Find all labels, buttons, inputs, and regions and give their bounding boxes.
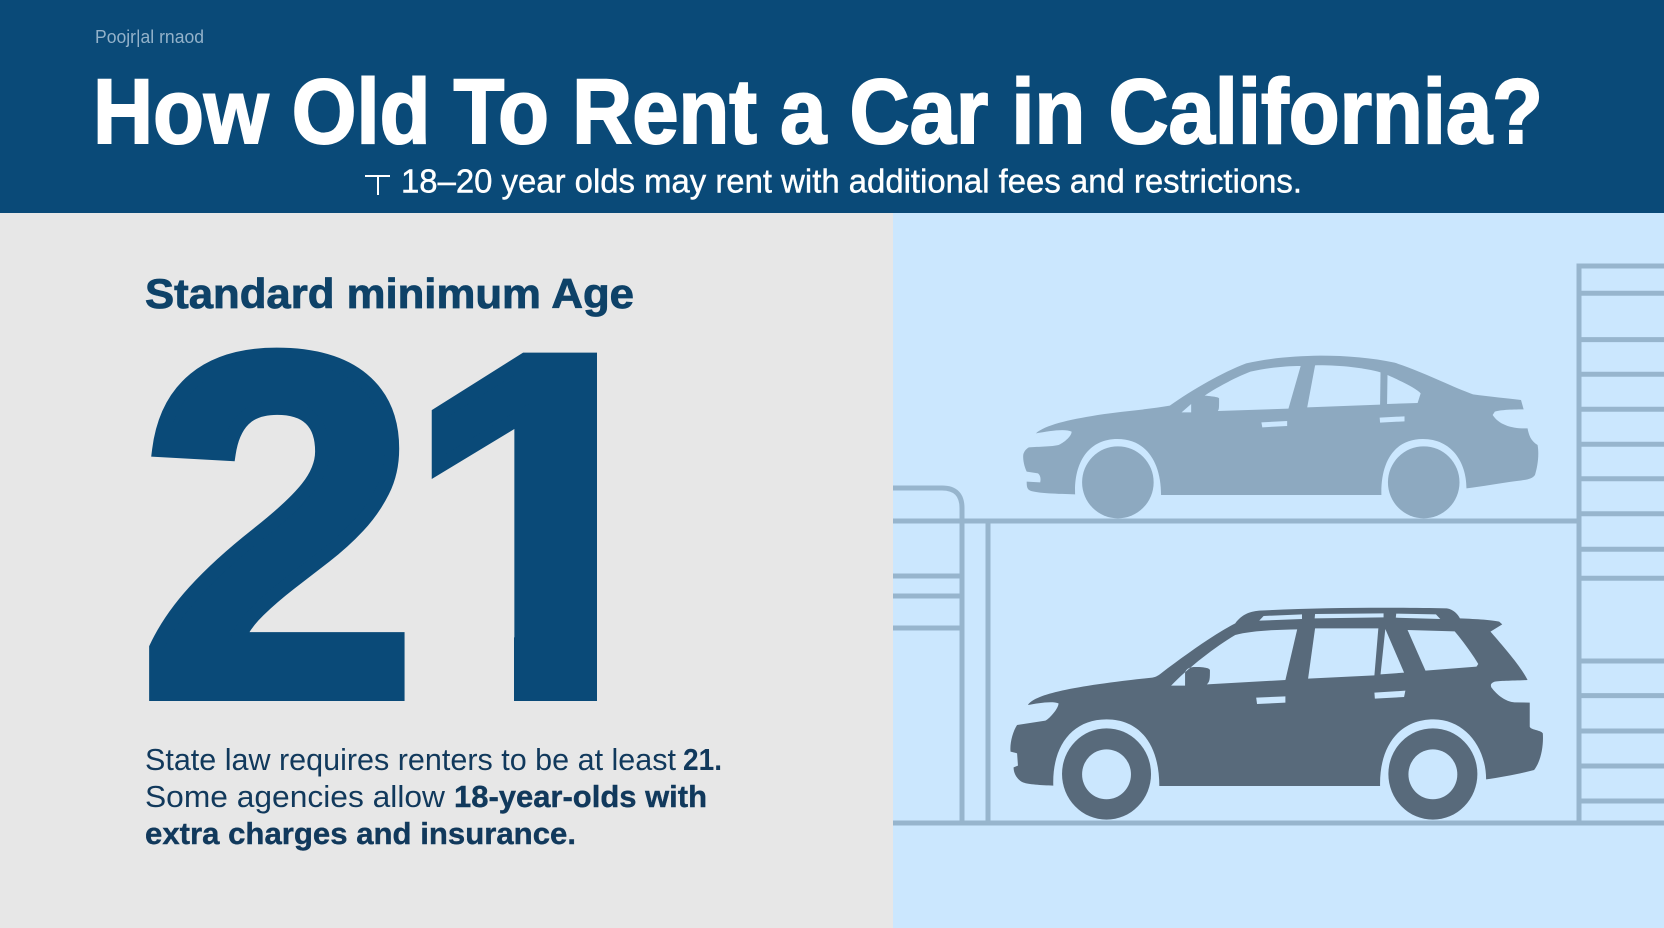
body text: 18-year-olds with — [454, 779, 707, 814]
icon: SUV on lower deck — [1010, 608, 1543, 820]
title: How Old To Rent a Car in California? — [93, 61, 1543, 163]
body text: extra charges and insurance. — [145, 816, 576, 851]
heading: Standard minimum Age — [145, 270, 634, 317]
panel: right light blue background — [893, 213, 1664, 928]
subtitle: 18–20 year olds may rent with additional fees and restrictions. — [401, 162, 1302, 200]
panel: left grey background — [0, 213, 893, 928]
parking structure frame — [893, 266, 1664, 823]
icon: subtitle marker — [365, 176, 390, 195]
eyebrow label: Poojr|al rnaod — [95, 27, 204, 47]
big number 21: 21 — [139, 254, 683, 797]
left panel content: standard minimum age — [139, 254, 722, 851]
header band — [0, 0, 1664, 213]
body text — [145, 742, 722, 851]
body text: Some agencies allow — [145, 779, 446, 814]
icon: sedan on upper deck — [1023, 356, 1538, 518]
body text: 21. — [683, 742, 722, 777]
body text: State law requires renters to be at least — [145, 742, 676, 777]
